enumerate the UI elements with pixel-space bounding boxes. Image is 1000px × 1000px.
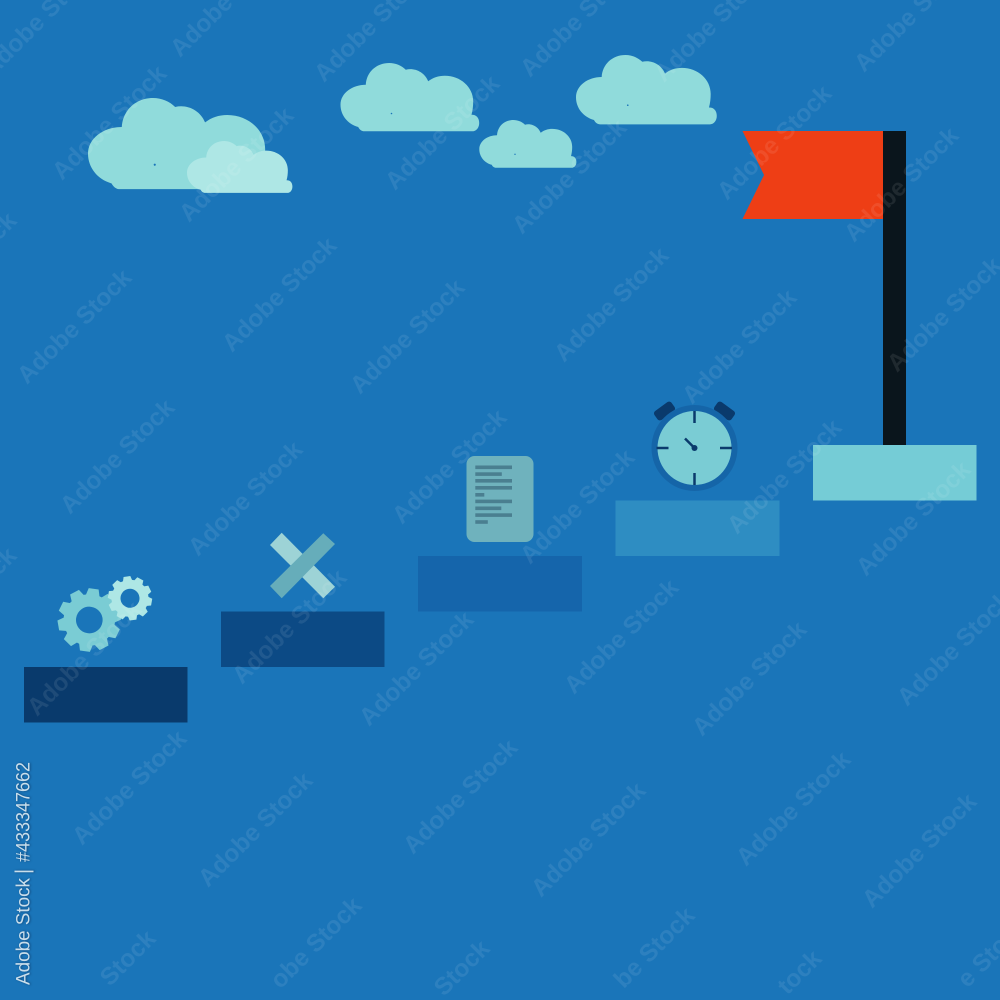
- step 4: [616, 500, 780, 556]
- watermark pattern: Stock: [95, 925, 162, 991]
- step 3: [418, 556, 582, 612]
- watermark pattern: Adobe Stock: [515, 444, 640, 569]
- watermark pattern: Adobe Stock: [12, 264, 137, 389]
- watermark pattern: Adobe Stock: [55, 394, 180, 519]
- step 1: [24, 667, 188, 722]
- cloud: top centre: [340, 63, 479, 131]
- watermark pattern: Adobe Stock: [559, 574, 684, 699]
- icon: document: [466, 456, 534, 542]
- step 5: [813, 445, 976, 500]
- watermark pattern: tock: [773, 945, 827, 1000]
- watermark pattern: Adobe Stock: [183, 436, 308, 561]
- watermark pattern: be Stock: [609, 902, 701, 993]
- icon: cross: [270, 533, 335, 598]
- watermark pattern: Adobe Stock: [526, 777, 651, 902]
- watermark pattern: Adobe Stock: [193, 767, 318, 892]
- watermark pattern: Adobe Stock: [174, 102, 299, 227]
- vertical stock id text: #433347662: [14, 762, 34, 862]
- watermark pattern: Adobe Stock: [731, 746, 856, 871]
- watermark pattern: Adobe Stock: [345, 274, 470, 399]
- flag pole: [883, 131, 906, 445]
- cloud: small overlapping front: [187, 141, 292, 193]
- watermark pattern: Adobe Stock: [227, 564, 352, 689]
- watermark pattern: Adobe Stock: [677, 284, 802, 409]
- watermark pattern: Adobe Stock: [354, 606, 479, 731]
- watermark pattern: Adobe Stock: [839, 122, 964, 247]
- watermark pattern: Adobe Stock: [549, 242, 674, 367]
- watermark pattern: obe Stock: [265, 892, 367, 994]
- icon: large gear: [53, 584, 125, 656]
- watermark pattern: Adobe Stock: [507, 114, 632, 239]
- watermark pattern: Stock: [429, 935, 496, 1000]
- cloud: large left: [88, 98, 273, 189]
- step 2: [221, 612, 384, 667]
- watermark pattern: Adobe Stock: [857, 788, 982, 913]
- cloud: top right: [576, 55, 717, 124]
- watermark pattern: Adobe Stock: [687, 616, 812, 741]
- vertical stock id text: Adobe Stock: [14, 878, 34, 985]
- icon: small gear: [105, 573, 155, 623]
- watermark pattern: Adobe Stock: [387, 404, 512, 529]
- watermark pattern: Adobe Stock: [722, 414, 847, 539]
- vertical stock id text: |: [12, 869, 34, 874]
- watermark pattern: Adobe Stock: [22, 596, 147, 721]
- watermark pattern: Adobe Stock: [217, 232, 342, 357]
- watermark pattern: Adobe Stock: [851, 456, 976, 581]
- watermark pattern: Adobe Stock: [380, 70, 505, 195]
- watermark pattern: Adobe Stock: [398, 734, 523, 859]
- watermark pattern: Adobe Stock: [47, 60, 172, 185]
- vertical stock id text: [12, 762, 34, 985]
- cloud: small centre: [479, 120, 576, 168]
- watermark pattern: Adobe Stock: [67, 725, 192, 850]
- watermark pattern: Adobe Stock: [712, 80, 837, 205]
- flag: [742, 131, 883, 219]
- icon: stopwatch: [652, 400, 738, 491]
